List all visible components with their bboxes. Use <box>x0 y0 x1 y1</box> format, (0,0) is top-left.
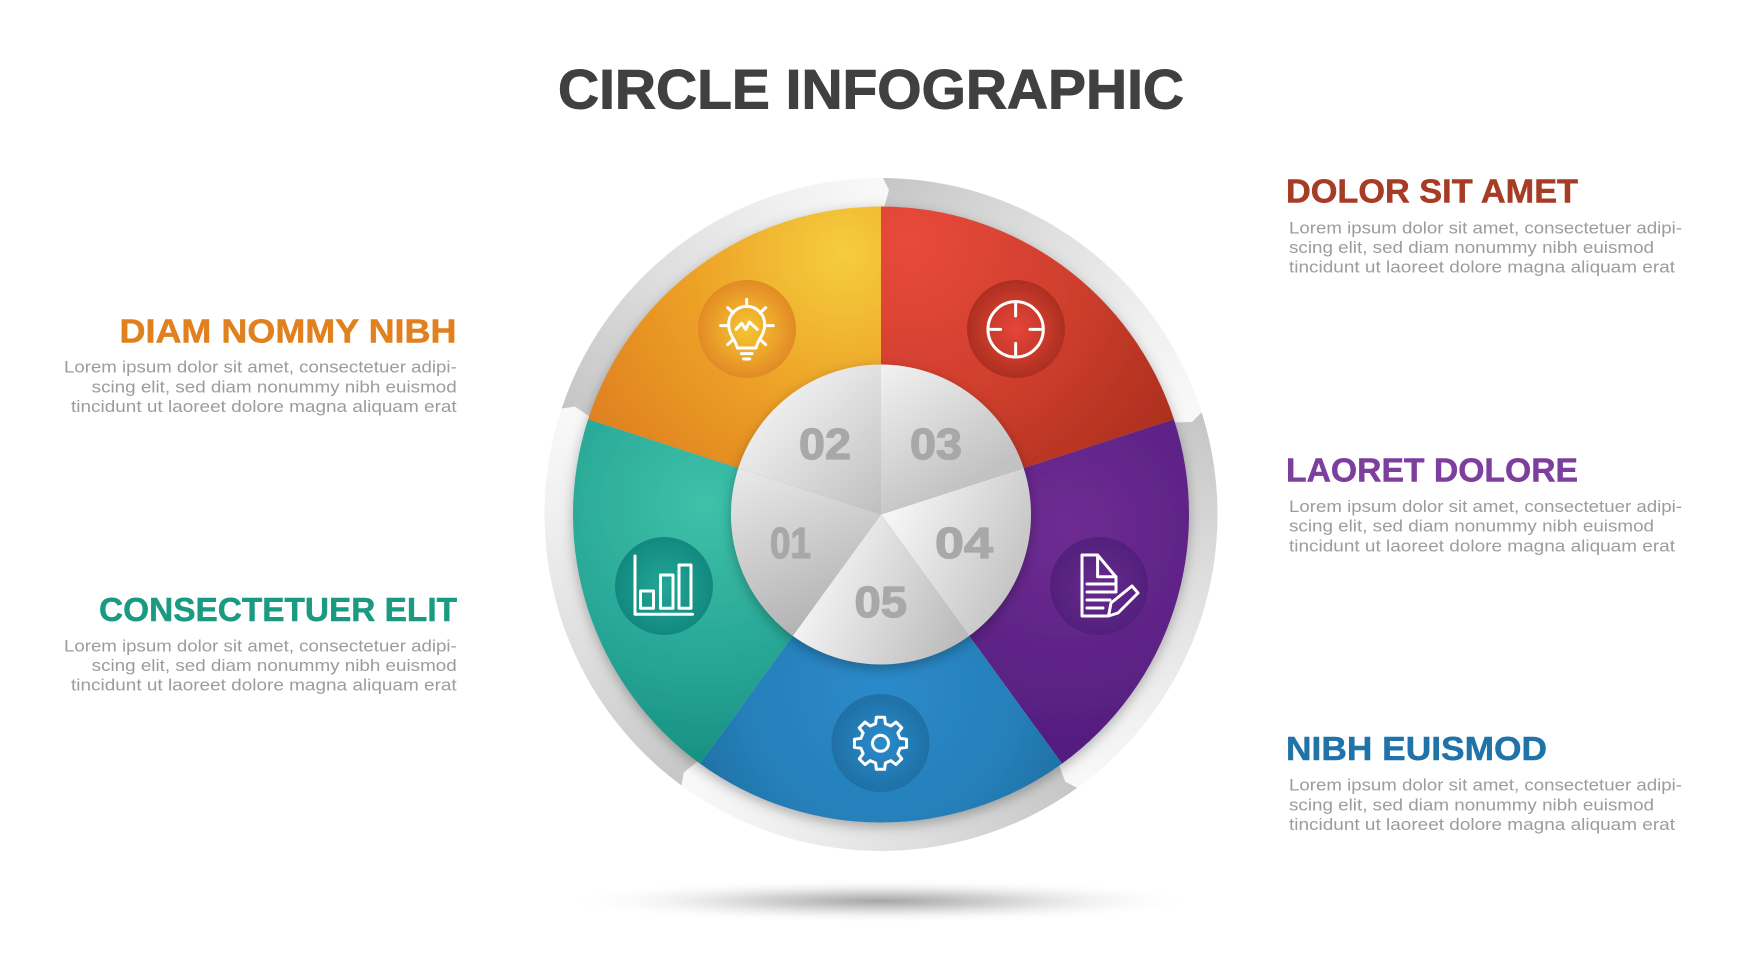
icon: bar chart <box>615 537 713 635</box>
body: tincidunt ut laoreet dolore magna aliquam erat <box>71 397 457 416</box>
centre hub <box>731 364 1031 664</box>
sector: blue <box>700 514 1062 823</box>
icon: target <box>967 280 1065 378</box>
circle diagram <box>462 107 1337 974</box>
text block: Diam Nommy Nibh <box>64 314 457 416</box>
body: scing elit, sed diam nonummy nibh euismod <box>1289 795 1654 814</box>
body: Lorem ipsum dolor sit amet, consectetuer adipi- <box>1289 497 1682 516</box>
body <box>1289 776 1682 834</box>
sector: orange <box>588 206 881 514</box>
number 05: 05 <box>854 578 907 627</box>
body: tincidunt ut laoreet dolore magna aliquam erat <box>1289 536 1675 555</box>
hub wedge 02 <box>738 364 881 514</box>
title: CIRCLE INFOGRAPHIC <box>558 58 1184 120</box>
body: tincidunt ut laoreet dolore magna aliquam erat <box>71 676 457 695</box>
body: Lorem ipsum dolor sit amet, consectetuer adipi- <box>64 636 457 655</box>
hub wedge 01 <box>731 468 881 636</box>
body: tincidunt ut laoreet dolore magna aliquam erat <box>1289 815 1675 834</box>
number 03: 03 <box>910 420 962 469</box>
body <box>1289 497 1682 555</box>
sector: red <box>881 206 1174 514</box>
body: scing elit, sed diam nonummy nibh euismod <box>92 377 457 396</box>
hub wedge 03 <box>881 364 1024 514</box>
icon: gear <box>832 694 930 792</box>
body: scing elit, sed diam nonummy nibh euismod <box>1289 517 1654 536</box>
text block: Laoret Dolore <box>1286 452 1682 555</box>
heading: NIBH EUISMOD <box>1286 731 1547 768</box>
icon: light bulb <box>698 280 796 378</box>
body: Lorem ipsum dolor sit amet, consectetuer adipi- <box>1289 776 1682 795</box>
number 01: 01 <box>770 519 811 568</box>
body: Lorem ipsum dolor sit amet, consectetuer adipi- <box>64 358 457 377</box>
sector: purple <box>881 419 1189 764</box>
icon: document and pencil <box>1050 537 1148 635</box>
text block: Dolor Sit Amet <box>1286 174 1682 277</box>
heading: DOLOR SIT AMET <box>1286 174 1579 210</box>
body <box>64 358 457 416</box>
body <box>64 636 457 695</box>
heading: CONSECTETUER ELIT <box>99 592 458 629</box>
body: scing elit, sed diam nonummy nibh euismod <box>1289 238 1654 257</box>
text block: Consectetuer Elit <box>64 592 458 695</box>
hub wedge 04 <box>881 468 1031 636</box>
coloured pie sectors <box>573 206 1189 823</box>
heading: LAORET DOLORE <box>1286 452 1578 489</box>
text block: Nibh Euismod <box>1286 731 1682 834</box>
heading: DIAM NOMMY NIBH <box>120 314 456 350</box>
body: tincidunt ut laoreet dolore magna aliquam erat <box>1289 258 1675 277</box>
ground shadow <box>562 879 1202 923</box>
number 02: 02 <box>799 420 851 469</box>
body: Lorem ipsum dolor sit amet, consectetuer adipi- <box>1289 218 1682 237</box>
sector: teal <box>573 419 881 764</box>
hub wedge 05 <box>793 514 969 664</box>
body: scing elit, sed diam nonummy nibh euismod <box>92 656 457 675</box>
body <box>1289 218 1682 277</box>
outer ring: five arrow segments <box>462 107 1337 974</box>
number 04: 04 <box>935 519 994 568</box>
